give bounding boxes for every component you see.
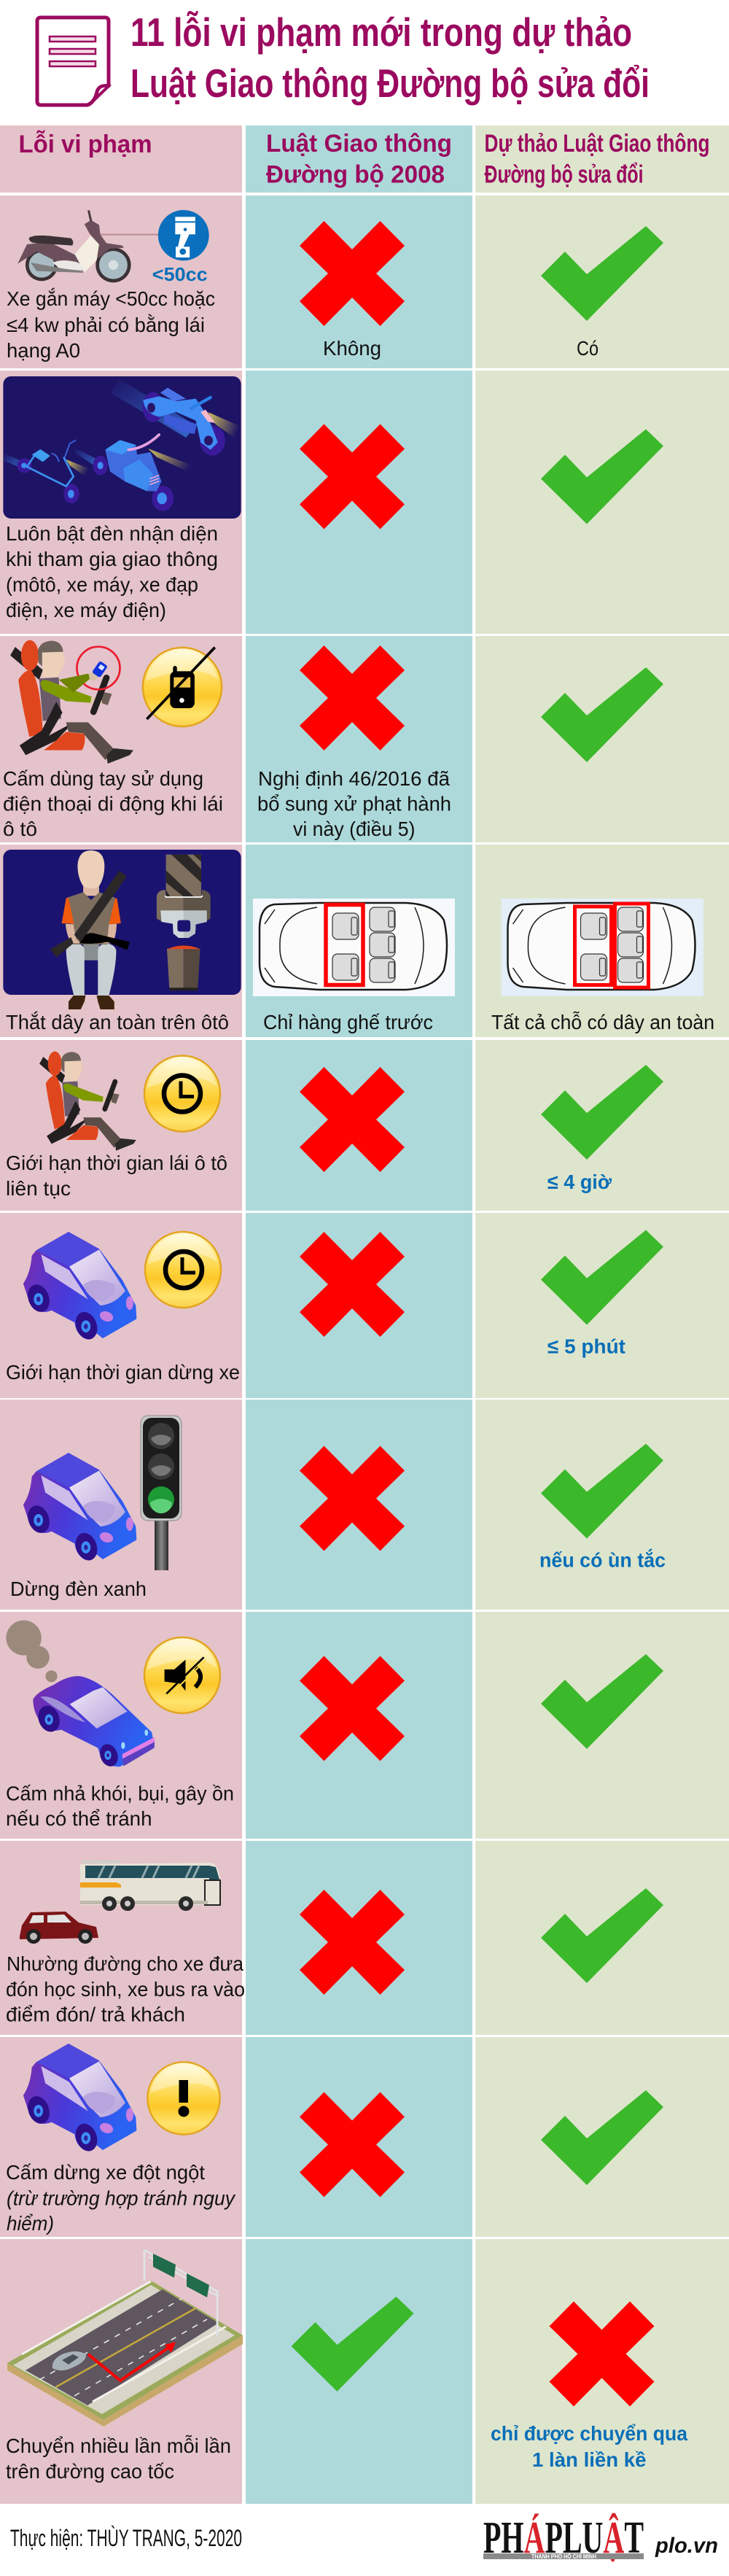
green check xyxy=(541,226,663,321)
text: violation 2 xyxy=(6,522,218,621)
row 7: stopping at green light xyxy=(0,1400,729,1610)
table header row xyxy=(0,125,729,193)
red cross xyxy=(300,1232,405,1337)
text: violation 9: Nhường đường cho xe đưa xyxy=(7,1952,243,1975)
icon: moped and piston: <50cc xyxy=(152,263,208,285)
text: violation 10: (trừ trường hợp tránh nguy xyxy=(7,2187,236,2210)
text: violation 8: nếu có thể tránh xyxy=(6,1807,152,1830)
text: violation 2: (môtô, xe máy, xe đạp xyxy=(6,573,198,596)
note: decree 46/2016 xyxy=(257,767,451,840)
credit line: Thực hiện: THÙY TRANG, 5-2020 xyxy=(10,2525,242,2551)
red cross xyxy=(300,2092,405,2197)
icon: coach bus xyxy=(80,1861,221,1911)
text: violation 9 xyxy=(6,1952,245,2026)
text: violation 1: hạng A0 xyxy=(7,339,80,362)
text: violation 10: Cấm dừng xe đột ngột xyxy=(6,2161,205,2184)
text: violation 11: Chuyển nhiều lần mỗi lần xyxy=(6,2435,231,2457)
icon: no phone ball xyxy=(143,648,222,726)
green check xyxy=(541,1654,663,1749)
logo: Pháp Luật: PHÁPLUẬT xyxy=(483,2513,644,2563)
green check xyxy=(541,429,663,524)
green check xyxy=(541,2090,663,2185)
green check xyxy=(541,1230,663,1324)
icon: no noise ball xyxy=(144,1637,220,1713)
green check xyxy=(541,1888,663,1983)
table header row: Lỗi vi phạm xyxy=(19,131,152,158)
icon: clock ball xyxy=(144,1056,220,1132)
text: violation 8 xyxy=(6,1782,234,1830)
label: up to 4 hours: ≤ 4 giờ xyxy=(547,1171,612,1193)
row 11: lane changes on expressway xyxy=(0,2239,729,2504)
diagram: car top view, all seats xyxy=(502,899,703,996)
row 10: sudden stops xyxy=(0,2037,729,2237)
red cross xyxy=(300,1446,405,1551)
row 6: stopping time limit xyxy=(0,1213,729,1398)
green check xyxy=(541,1444,663,1539)
text: violation 2: điện, xe máy điện) xyxy=(6,599,166,621)
note: decree 46/2016: vi này (điều 5) xyxy=(293,818,416,840)
text: violation 2: Luôn bật đèn nhận diện xyxy=(6,522,218,545)
text: violation 8: Cấm nhả khói, bụi, gây ồn xyxy=(6,1782,234,1804)
red cross xyxy=(550,2302,655,2407)
text: violation 1 xyxy=(7,287,215,362)
diagram: car top view, front seats xyxy=(253,899,455,996)
text: violation 3: ô tô xyxy=(3,818,37,840)
icon: smoking sports car xyxy=(6,1621,155,1769)
row 4: seat belts xyxy=(0,845,729,1037)
icon: moped and piston xyxy=(17,210,209,285)
text: violation 7: Dừng đèn xanh xyxy=(10,1578,147,1600)
icon: warning ball xyxy=(147,2062,220,2135)
label: front row only: Chỉ hàng ghế trước xyxy=(263,1011,433,1033)
text: violation 9: điểm đón/ trả khách xyxy=(6,2003,185,2026)
icon: clock ball xyxy=(145,1232,221,1308)
text: violation 6: Giới hạn thời gian dừng xe xyxy=(6,1361,240,1384)
red cross xyxy=(300,1067,405,1172)
row 3: phone while driving xyxy=(0,636,729,842)
label: one adjacent lane only xyxy=(491,2422,687,2471)
text: violation 11: trên đường cao tốc xyxy=(6,2460,174,2483)
icon: blue car xyxy=(23,1232,136,1343)
label: all seats: Tất cả chỗ có dây an toàn xyxy=(491,1011,714,1033)
text: violation 1: ≤4 kw phải có bằng lái xyxy=(7,314,205,336)
label: one adjacent lane only: 1 làn liền kề xyxy=(532,2448,646,2471)
label: one adjacent lane only: chỉ được chuyển qua xyxy=(491,2422,687,2445)
icon: blue car xyxy=(23,1453,136,1564)
text: violation 5: liên tục xyxy=(6,1177,71,1200)
green check xyxy=(292,2297,414,2391)
text: violation 5: Giới hạn thời gian lái ô tô xyxy=(6,1152,227,1174)
row 5: continuous driving limit xyxy=(0,1040,729,1211)
icon: driver xyxy=(39,1052,136,1151)
text: violation 1: Xe gắn máy <50cc hoặc xyxy=(7,287,215,310)
note: decree 46/2016: Nghị định 46/2016 đã xyxy=(258,767,450,790)
label: if congested: nếu có ùn tắc xyxy=(539,1549,666,1571)
icon: seatbelt panel xyxy=(3,850,241,1009)
title icon: document xyxy=(37,18,109,105)
green check xyxy=(541,1065,663,1160)
table header row: Luật Giao thông xyxy=(266,130,452,158)
text: violation 3 xyxy=(3,767,223,840)
row 1: moped licence xyxy=(0,195,729,368)
title xyxy=(130,9,650,106)
text: violation 10 xyxy=(6,2161,236,2235)
text: violation 4: Thắt dây an toàn trên ôtô xyxy=(6,1011,229,1033)
icon: expressway xyxy=(7,2250,243,2426)
text: violation 3: Cấm dùng tay sử dụng xyxy=(3,767,203,790)
red cross xyxy=(300,645,405,750)
logo: plo.vn: plo.vn xyxy=(655,2534,718,2558)
icon: traffic light xyxy=(141,1416,182,1570)
row 9: yield to school and city buses xyxy=(0,1841,729,2035)
row 2: identification lights xyxy=(0,371,729,634)
red cross xyxy=(300,221,405,326)
text: violation 5 xyxy=(6,1152,227,1200)
red cross xyxy=(300,424,405,529)
label: Không: Không xyxy=(323,337,381,360)
icon: neon motorbikes panel xyxy=(3,376,241,519)
icon: red car xyxy=(20,1912,98,1944)
icon: driver holding phone xyxy=(10,640,133,764)
note: decree 46/2016: bổ sung xử phạt hành xyxy=(257,792,451,815)
text: violation 3: điện thoại di động khi lái xyxy=(3,792,223,815)
label: Có: Có xyxy=(577,337,599,360)
table header row: Đường bộ sửa đổi xyxy=(484,160,643,188)
text: violation 9: đón học sinh, xe bus ra vào xyxy=(6,1978,245,2001)
red cross xyxy=(300,1890,405,1995)
icon: blue car xyxy=(23,2044,136,2154)
table header row: Đường bộ 2008 xyxy=(266,160,445,188)
row 8: smoke, dust, noise xyxy=(0,1612,729,1839)
red cross xyxy=(300,1656,405,1761)
text: violation 10: hiểm) xyxy=(7,2212,54,2235)
label: up to 5 minutes: ≤ 5 phút xyxy=(547,1335,625,1358)
logo: Pháp Luật: THÀNH PHỐ HỒ CHÍ MINH xyxy=(531,2553,596,2560)
green check xyxy=(541,667,663,762)
text: violation 11 xyxy=(6,2435,231,2483)
text: violation 2: khi tham gia giao thông xyxy=(6,548,218,570)
